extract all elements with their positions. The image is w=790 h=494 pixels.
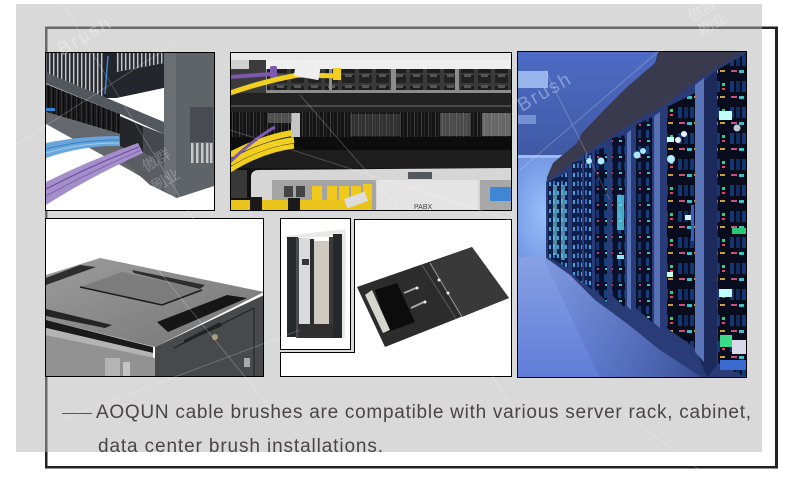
photo: open rack cabinet [280,218,350,350]
rack grille left [45,52,104,97]
front strip [46,328,153,358]
caption text: AOQUN cable brushes are compatible with various server rack, cabinet, [96,402,751,423]
dash before caption [62,413,92,414]
caption text [96,402,751,457]
caption text: data center brush installations. [98,436,383,457]
dark overhang [546,52,747,190]
cabinet side [155,295,264,377]
photo: cabinet roof [45,218,264,377]
black brush strip [46,84,120,134]
ceiling light [518,71,548,124]
ports with yellow plugs [312,184,372,200]
floor reflection [545,258,703,378]
photo: cable brush in rack frame [45,52,215,211]
photo: patch panel with brush strip [230,52,512,211]
black rails [230,93,512,112]
rack grille right [116,52,164,72]
rail below brush [46,112,177,198]
grommet block [120,116,143,158]
yellow cable bundle bottom [230,200,372,210]
cable bundle entering brush [230,133,292,155]
device faceplate [251,168,512,211]
photo: brush panel plate [357,247,509,347]
purple cable bundle [46,143,143,205]
glowing lights [553,111,747,370]
watermark text: Chinese top right second: 刷业 [696,10,730,39]
column [164,53,214,198]
rack dark interior [104,63,164,98]
brush strip [230,112,512,137]
front door [46,335,155,377]
watermark text: Chinese: 傲群 [140,146,174,175]
purple patch cable [230,74,272,77]
watermark text: Brush: Brush [54,12,116,60]
white gap [117,88,164,121]
floor [517,256,720,378]
roof surface [46,258,264,347]
roof slots [46,265,96,285]
panel: white L-shaped backing [280,220,512,376]
ceiling [517,51,747,161]
watermark text: Brush photo: Brush [514,68,576,116]
yellow patch cable [230,75,340,93]
back wall [517,157,577,260]
blue cable bundle [46,136,120,158]
patch panel top [230,53,512,60]
photo: patch panel with brush strip: PABX [414,204,432,211]
server row housing [546,50,747,378]
photo: data center aisle [517,50,747,378]
beam [45,72,164,134]
roof panel [80,272,202,305]
watermark text: Chinese second: 刷业 [148,166,183,195]
foot [120,152,177,198]
front band [46,320,153,353]
pillars [695,70,717,378]
vent holes [190,107,213,142]
server racks [717,53,747,378]
